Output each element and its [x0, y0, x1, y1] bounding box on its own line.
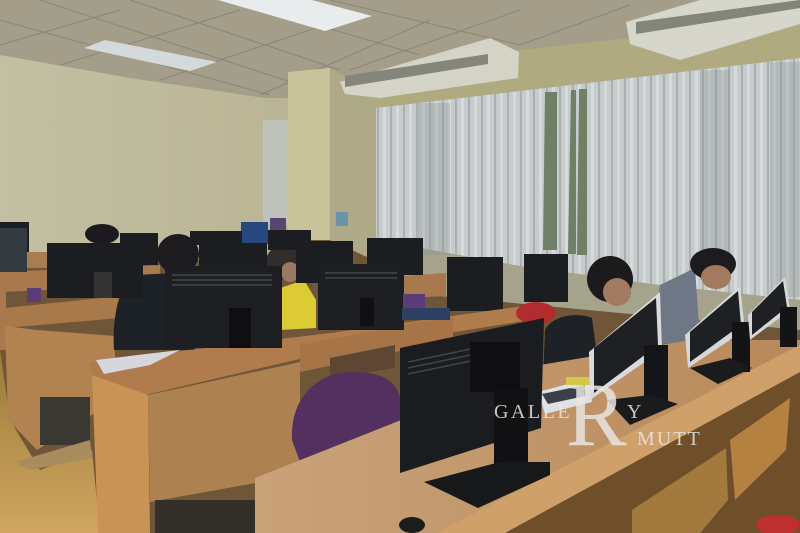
- people back: [85, 224, 316, 350]
- air conditioner right: [626, 0, 800, 60]
- purple chair left: [27, 288, 41, 302]
- watermark: R: [566, 364, 627, 465]
- monitors front-right: [400, 277, 797, 508]
- pillar: [288, 68, 378, 262]
- front desk row left: [90, 305, 530, 533]
- under-desk base: [0, 270, 800, 533]
- monitors front-left row: [165, 264, 556, 348]
- watermark: MUTT: [637, 428, 702, 450]
- upper wall right: [378, 20, 800, 112]
- watermark: Y: [627, 401, 641, 423]
- ceiling: [0, 0, 800, 125]
- papers on desk: [538, 377, 592, 414]
- person right: [652, 248, 736, 345]
- back curtain: [263, 120, 289, 225]
- air conditioner middle: [340, 38, 519, 98]
- watermark: GALLE: [494, 401, 572, 423]
- back desk row: [0, 252, 446, 350]
- person right middle: [543, 256, 633, 378]
- ceiling lights: [84, 0, 372, 71]
- front desk right: [255, 340, 800, 533]
- left wall: [0, 55, 290, 260]
- window sill wall: [376, 240, 800, 330]
- watermark: [494, 364, 702, 465]
- wooden floor: [0, 350, 100, 533]
- vertical blinds: [376, 58, 800, 300]
- monitors back row: [0, 222, 568, 311]
- purple chair front: [292, 372, 403, 462]
- back chairs: [241, 218, 286, 244]
- desk row 2: [5, 296, 120, 470]
